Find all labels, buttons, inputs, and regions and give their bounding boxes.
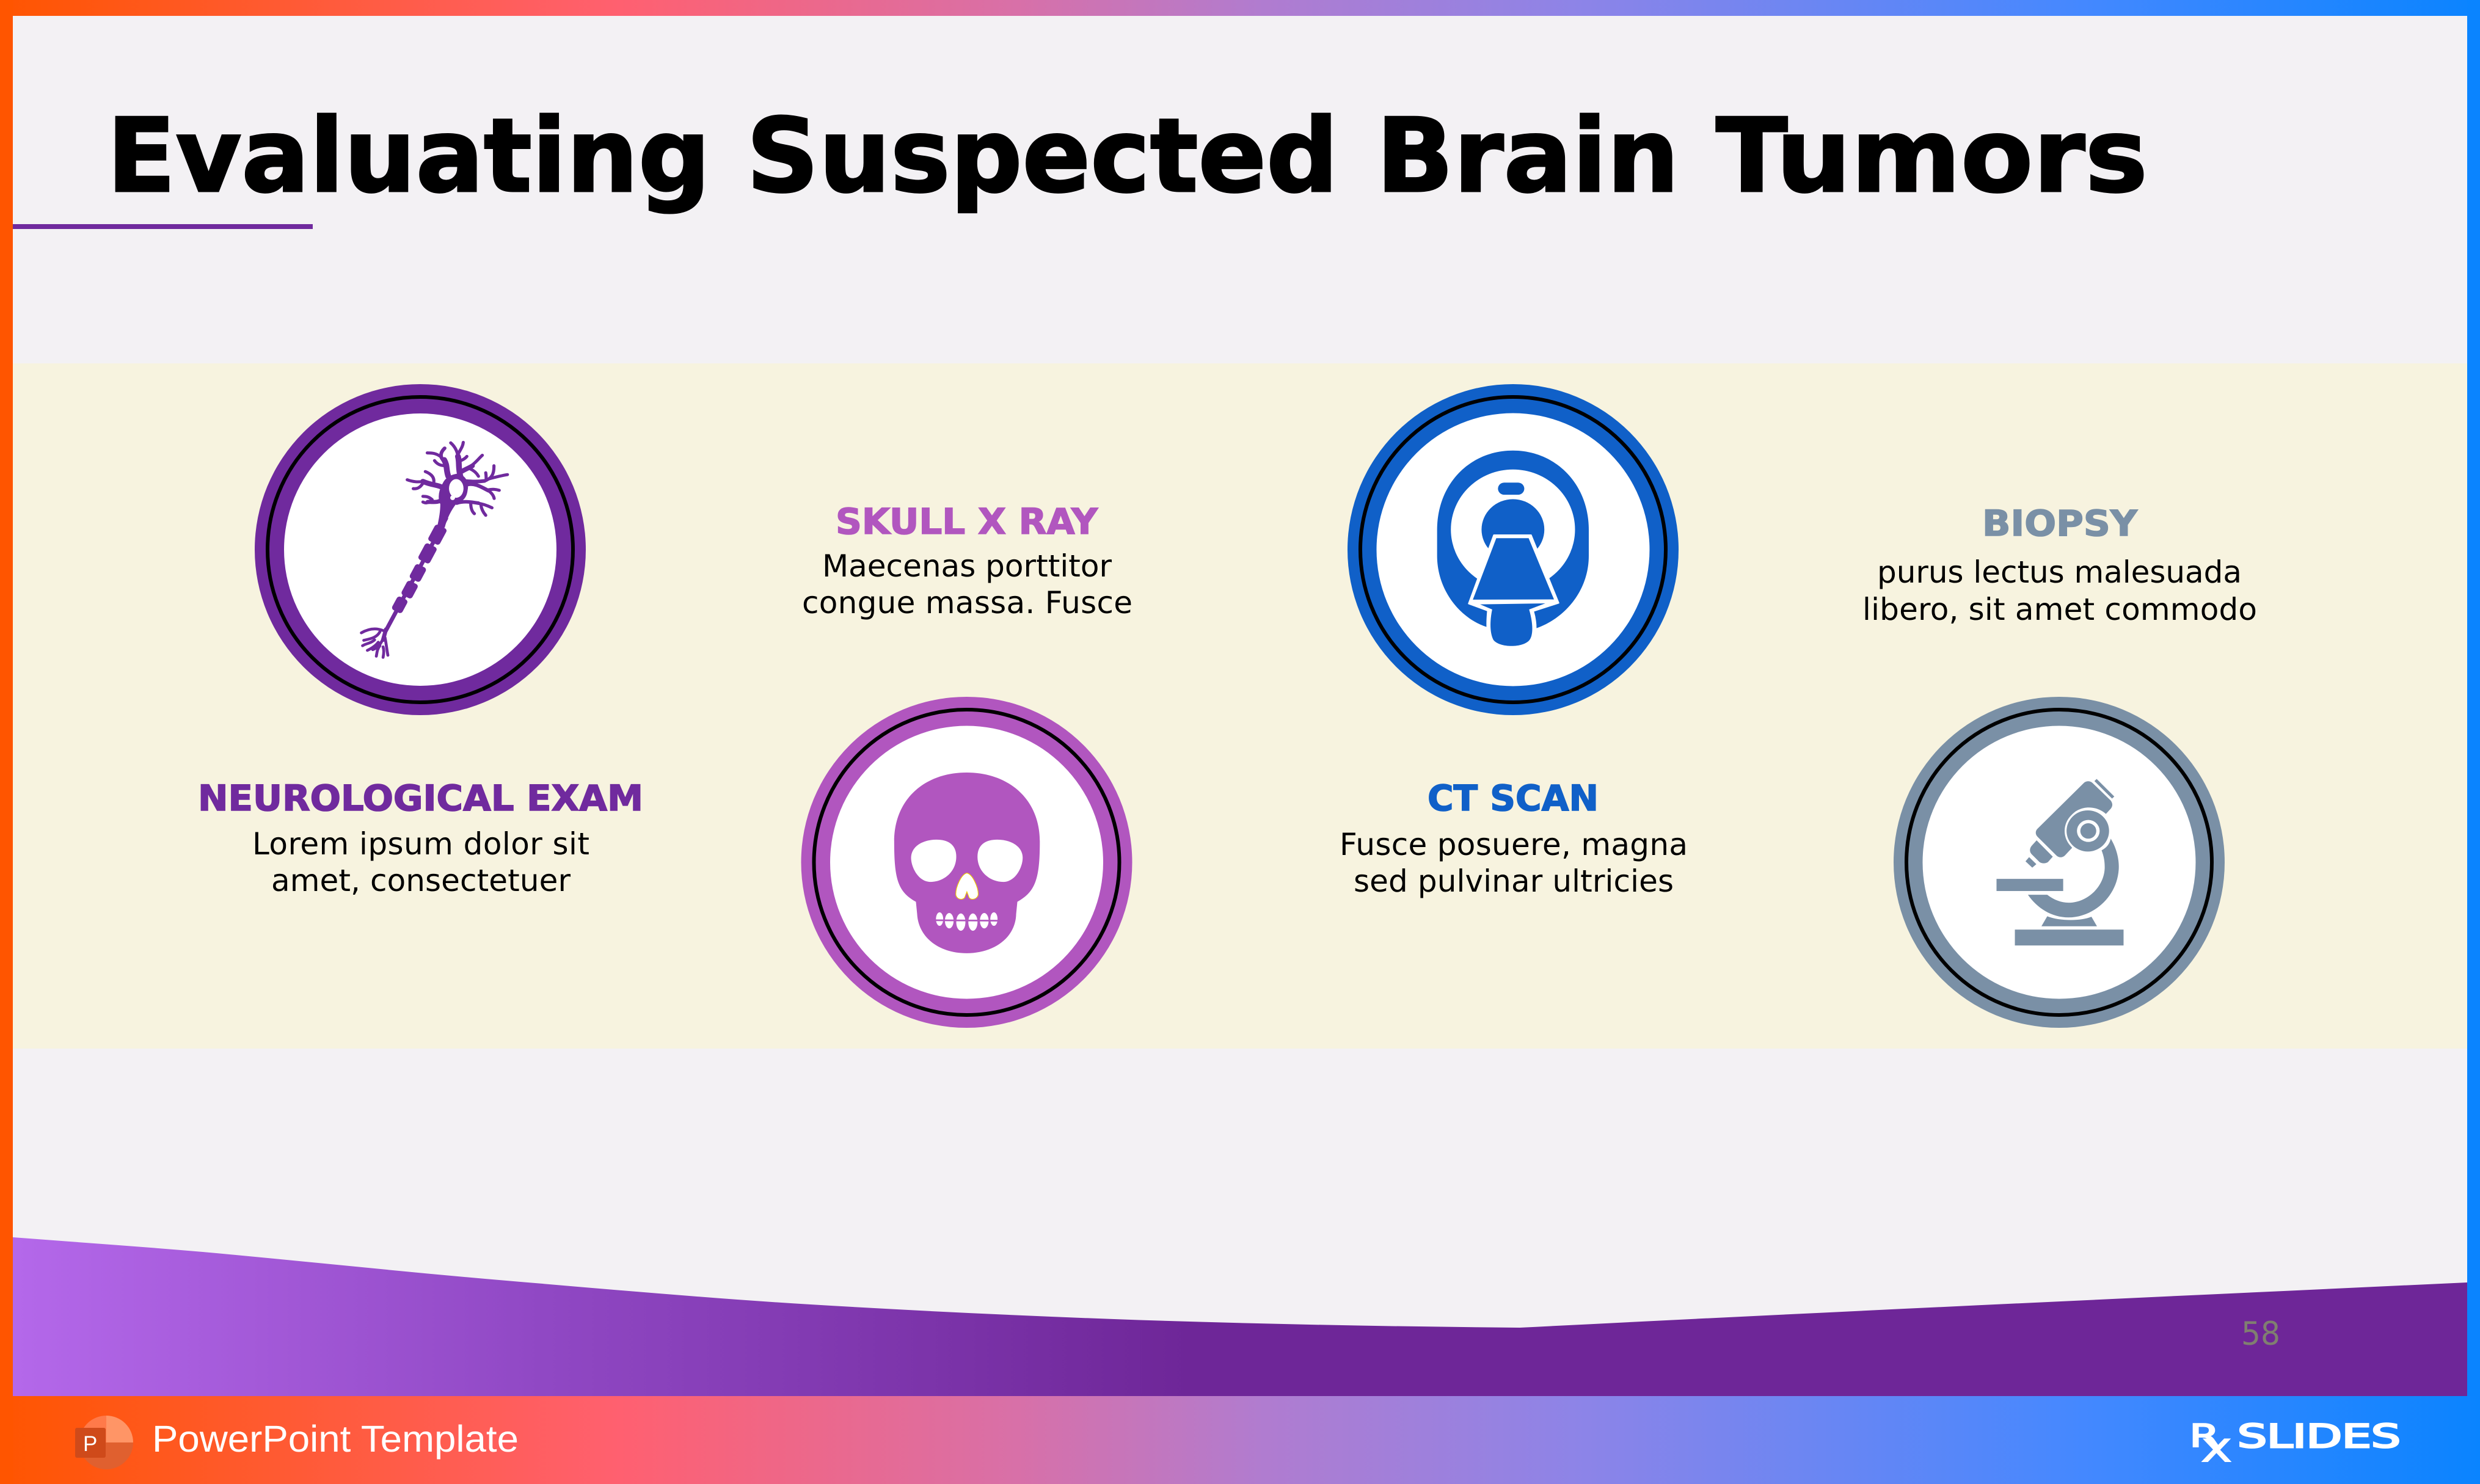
- body text: biopsy: purus lectus malesuada: [1877, 555, 2242, 590]
- logo: rx slides: [2189, 1418, 2401, 1469]
- body text: ct scan: sed pulvinar ultricies: [1354, 864, 1674, 899]
- body text: skull x ray: [802, 548, 1132, 620]
- title: Suspected: [746, 97, 1338, 216]
- logo: rx slides: SLIDES: [2237, 1418, 2401, 1455]
- logo: rx slides: X: [2201, 1433, 2231, 1469]
- heading: neurological exam: NEUROLOGICAL EXAM: [198, 777, 643, 819]
- icon: powerpoint logo: [75, 1416, 133, 1469]
- right border: [2467, 0, 2480, 1484]
- panel: ct scan: [1340, 384, 1688, 899]
- logo: rx slides: R: [2189, 1418, 2220, 1455]
- wave shape: [13, 1237, 2467, 1396]
- title: Evaluating: [107, 97, 710, 216]
- title: Brain: [1376, 97, 1679, 216]
- page number: 58: [2241, 1315, 2280, 1353]
- icon: skull badge: [801, 697, 1132, 1028]
- title: [107, 97, 2148, 216]
- body text: ct scan: [1340, 827, 1688, 899]
- heading: biopsy: BIOPSY: [1982, 503, 2138, 544]
- heading: skull x ray: SKULL X RAY: [836, 501, 1098, 542]
- body text: biopsy: [1862, 555, 2257, 627]
- left border: [0, 0, 13, 1484]
- left border footer segment: [0, 1396, 13, 1484]
- body text: skull x ray: Maecenas porttitor: [822, 548, 1112, 584]
- body text: neurological exam: Lorem ipsum dolor sit: [252, 826, 589, 862]
- panel: biopsy: [1862, 503, 2257, 1028]
- panel: skull x ray: [801, 501, 1132, 1028]
- body text: neurological exam: [252, 826, 589, 898]
- panel: neurological exam: [198, 384, 643, 898]
- footer label: PowerPoint Template: [152, 1418, 519, 1460]
- icon: ct scanner badge: [1348, 384, 1679, 715]
- body text: skull x ray: congue massa. Fusce: [802, 585, 1132, 620]
- title underline: [13, 224, 313, 229]
- icon: powerpoint logo: P: [83, 1432, 97, 1456]
- content band: [13, 363, 2467, 1049]
- body text: biopsy: libero, sit amet commodo: [1862, 592, 2257, 627]
- footer bar: [0, 1396, 2480, 1484]
- body text: neurological exam: amet, consectetuer: [271, 863, 571, 898]
- title: Tumors: [1716, 97, 2148, 216]
- icon: microscope badge: [1894, 697, 2225, 1028]
- body text: ct scan: Fusce posuere, magna: [1340, 827, 1688, 862]
- top gradient bar: [0, 0, 2480, 16]
- icon: neuron badge: [255, 384, 586, 715]
- heading: ct scan: CT SCAN: [1428, 777, 1599, 819]
